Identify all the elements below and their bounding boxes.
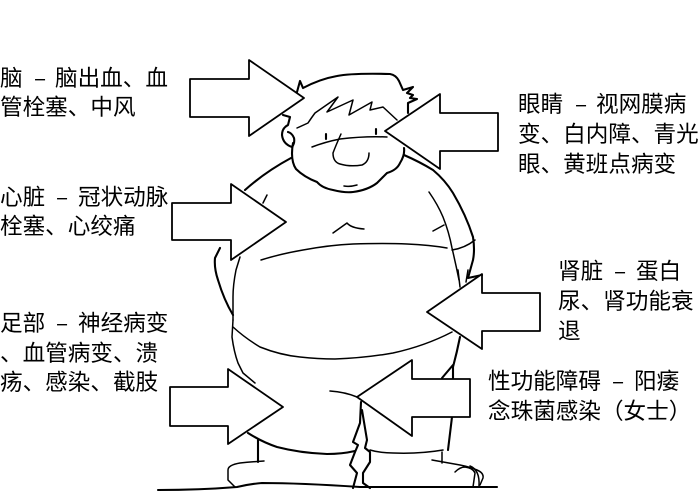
text: kidney: 肾脏	[558, 253, 603, 286]
text: brain: 脑出血、血	[55, 60, 168, 93]
text: heart: 心脏	[0, 179, 45, 212]
text: feet: 疡、感染、截肢	[0, 364, 158, 397]
text: kidney: 尿、肾功能衰	[558, 283, 694, 316]
arrow: kidney	[427, 274, 540, 349]
text: eyes: 视网膜病	[596, 86, 686, 119]
text: feet	[0, 305, 168, 397]
text: brain: 脑	[0, 60, 23, 93]
text: eyes: –	[575, 86, 587, 119]
arrow: heart	[172, 184, 286, 260]
text: feet: 神经病变	[78, 305, 168, 338]
arrow: brain	[190, 60, 304, 136]
face: eyes, brow line, nose, chin	[312, 129, 387, 186]
text: heart	[0, 179, 169, 241]
text: heart: 冠状动脉	[78, 179, 169, 212]
text: eyes: 变、白内障、青光	[518, 116, 699, 149]
feet	[228, 452, 483, 487]
text: heart: –	[56, 179, 68, 212]
text: feet: 足部	[0, 305, 45, 338]
text: eyes: 眼、黄班点病变	[518, 146, 676, 179]
torso, chest and arms	[215, 155, 482, 320]
head outline and hair	[292, 74, 417, 192]
ground line	[158, 483, 497, 490]
text: eyes: 眼睛	[518, 86, 563, 119]
text: brain	[0, 60, 168, 122]
arrow: sexual function	[357, 360, 470, 436]
arrow: feet	[170, 369, 283, 444]
text: feet: 、血管病变、溃	[0, 335, 158, 368]
text: heart: 栓塞、心绞痛	[0, 208, 136, 241]
ear	[282, 115, 294, 147]
text: kidney: 退	[558, 313, 581, 346]
text: sexual function: –	[612, 363, 624, 396]
text: sexual function: 念珠菌感染（女士）	[488, 393, 691, 426]
text: eyes	[518, 86, 699, 179]
legs	[258, 402, 370, 488]
shorts	[232, 320, 460, 454]
text: brain: –	[34, 60, 46, 93]
text: sexual function	[488, 363, 691, 426]
text: kidney: 蛋白	[636, 253, 681, 286]
text: kidney	[558, 253, 694, 346]
text: brain: 管栓塞、中风	[0, 89, 136, 122]
text: sexual function: 性功能障碍	[488, 363, 601, 396]
figure: overweight cartoon person	[158, 74, 497, 490]
text: feet: –	[56, 305, 68, 338]
text: sexual function: 阳痿	[634, 363, 679, 396]
text: kidney: –	[614, 253, 626, 286]
arrow: eyes	[385, 94, 498, 169]
